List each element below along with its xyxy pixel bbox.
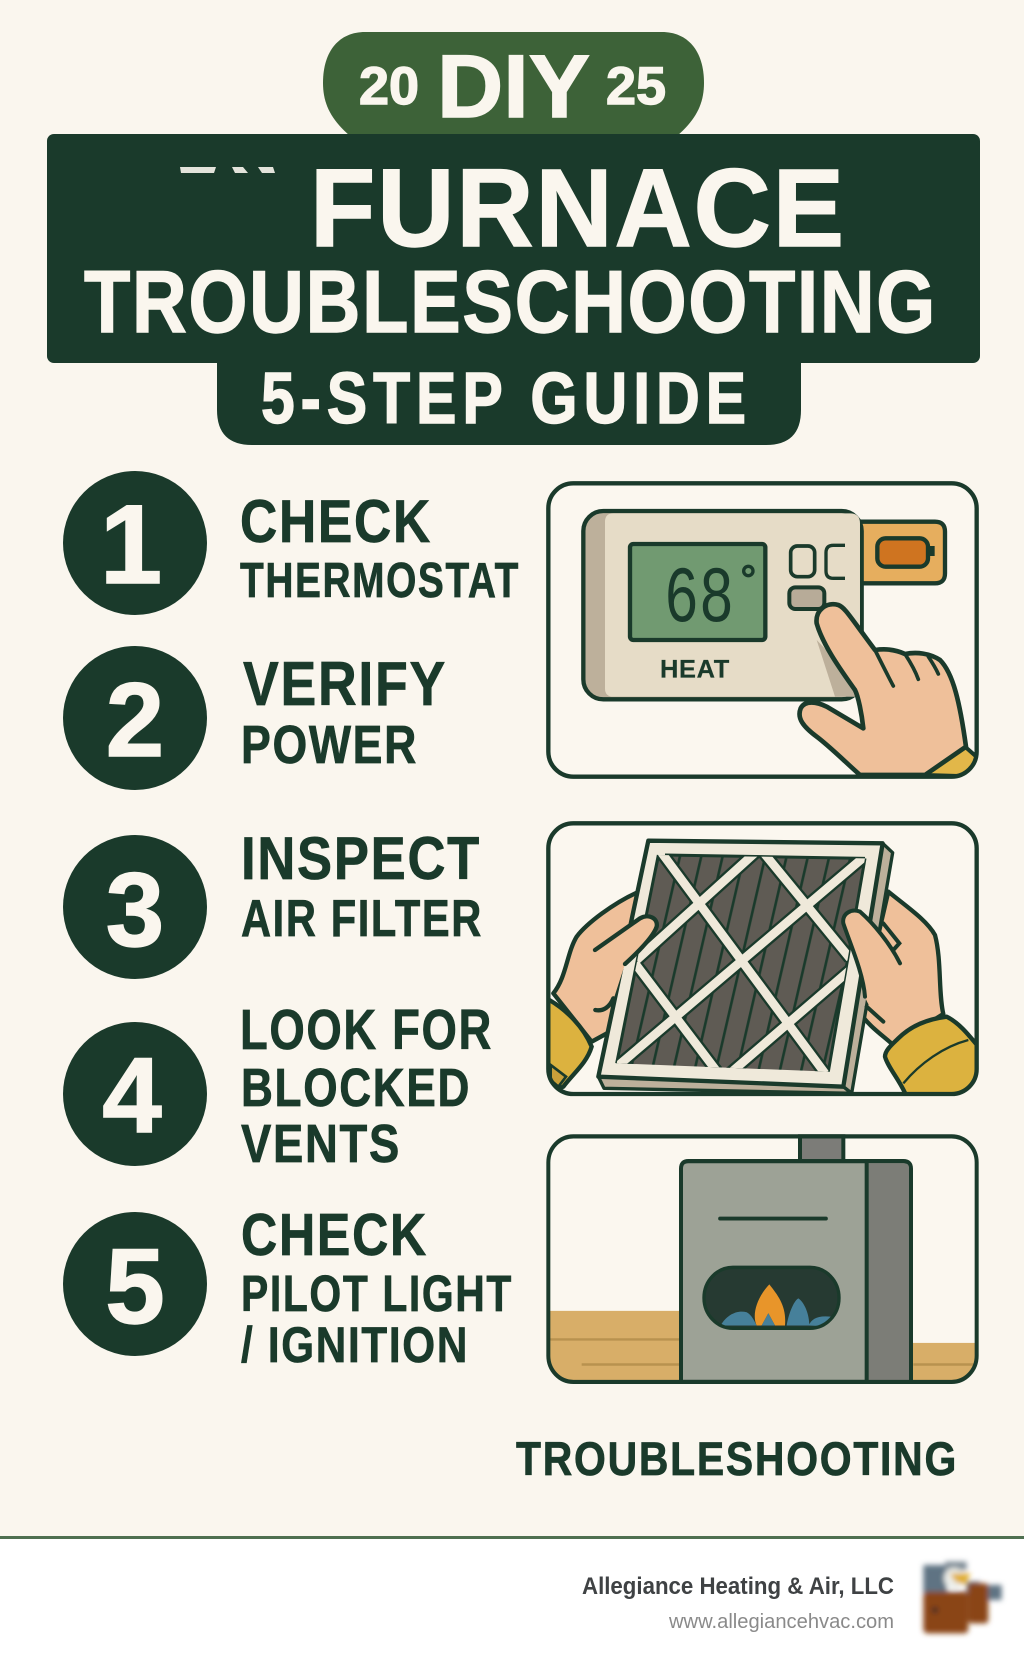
step 2: verify power: VERIFY [243,650,447,719]
step 2: verify power [63,646,447,790]
step 5: check pilot light / ignition: 5 [105,1226,165,1346]
icon: right thumb [843,911,907,1023]
burner window with flame [704,1267,839,1328]
title banner: FURNACE [310,147,846,270]
icon: right sleeve [885,1017,978,1097]
badge: DIY 2025: 25 [606,57,666,116]
step 1: check thermostat: CHECK [240,488,432,555]
furnace unit [681,1136,911,1382]
step 4: look for blocked vents [63,998,493,1174]
title banner [47,134,980,363]
step 1: check thermostat: 1 [100,482,162,607]
website: www.allegiancehvac.com [668,1611,894,1633]
step 5: check pilot light / ignition: CHECK [241,1202,428,1268]
caption: troubleshooting: TROUBLESHOOTING [516,1432,958,1485]
icon: air filter [598,841,893,1093]
step 4: look for blocked vents: LOOK FOR [240,998,493,1062]
logo: eagle [923,1562,1002,1633]
panel: thermostat illustration [548,483,978,777]
icon: left thumb [590,916,657,1023]
step 5: check pilot light / ignition: / IGNITION [241,1317,469,1373]
panel: furnace illustration [548,1136,978,1384]
company name: Allegiance Heating & Air, LLC [582,1573,894,1600]
floor [548,1311,978,1384]
step 4: look for blocked vents: 4 [102,1035,162,1155]
buttons [789,545,845,609]
subtitle tab: 5-step guide: 5-STEP GUIDE [261,359,752,439]
step 2: verify power: 2 [106,662,164,779]
step 3: inspect air filter: INSPECT [241,825,481,892]
badge: DIY 2025 [323,32,704,140]
badge: DIY 2025: DIY [437,36,590,136]
badge: DIY 2025: 20 [359,57,419,116]
display: 68 degrees: 68 [664,555,734,646]
step 3: inspect air filter: 3 [106,852,164,969]
panel: air filter illustration [548,823,978,1097]
step 5: check pilot light / ignition: PILOT LIGHT [241,1265,513,1322]
icon: left hand [548,893,640,1093]
step 5: check pilot light / ignition [63,1202,513,1373]
step 3: inspect air filter: AIR FILTER [241,890,483,948]
step 1: check thermostat: THERMOSTAT [240,554,520,608]
icon: right hand [860,892,943,1045]
step 1: check thermostat [63,471,520,615]
icon: battery tab [860,522,945,583]
header: title block [47,32,980,445]
step 4: look for blocked vents: BLOCKED [241,1058,471,1118]
step 4: look for blocked vents: VENTS [241,1114,401,1174]
step 3: inspect air filter [63,825,483,979]
footer [0,1536,1024,1666]
display: 68 degrees [630,544,765,646]
step 2: verify power: POWER [241,715,418,775]
thermostat body [583,511,862,699]
icon: hand pressing button [800,604,978,777]
label: heat: HEAT [660,656,730,684]
